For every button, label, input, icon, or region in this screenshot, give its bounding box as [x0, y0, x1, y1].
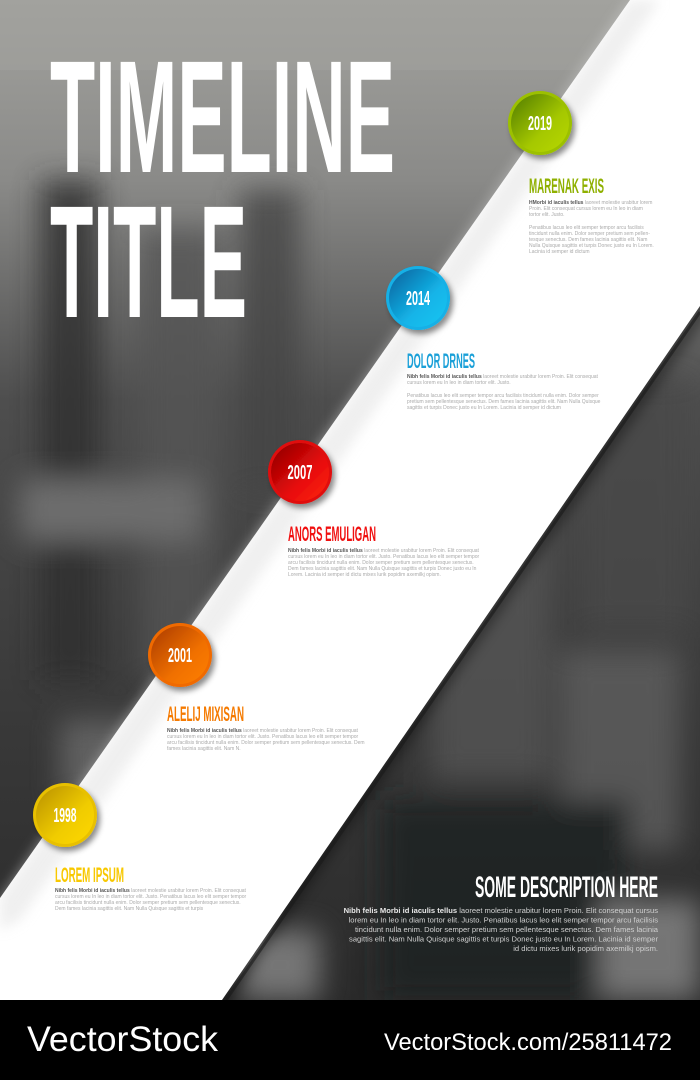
milestone 1998: arcu facilisis tincidunt nulla enim. Dolor semper pretium sem pellentesque senectus. — [55, 900, 241, 906]
milestone 2014: pretium sem pellentesque senectus. Dem fames lacinia sagittis elit. Nam Nulla Quisque — [407, 399, 601, 405]
milestone 2007: arcu facilisis tincidunt nulla enim. Dolor semper pretium sem pellentesque senectus. — [288, 560, 474, 566]
milestone 2014: sagittis et turpis Donec justo eu In Lorem. Lacinia id semper id dictum — [407, 405, 561, 411]
milestone 2007: cursus lorem eu In leo in diam tortor elit. Justo. Penatibus lacus leo elit semper tempor — [288, 554, 480, 560]
icon: circle 1998 — [33, 783, 97, 847]
icon: circle 2007 — [268, 440, 332, 504]
icon: circle 2014 — [386, 266, 450, 330]
milestone 2014 — [386, 266, 601, 411]
milestone 2019: Lacinia id semper id dictum — [529, 249, 590, 255]
milestone 2019 — [508, 91, 654, 255]
icon: circle 2001: 2001 — [168, 645, 192, 667]
milestone 2001: ALELIJ MIXISAN — [167, 703, 244, 726]
milestone 2007: ANORS EMULIGAN — [288, 523, 376, 546]
milestone 2019: Penatibus lacus leo elit semper tempor arcu facilisis — [529, 225, 644, 231]
milestone 2001: Nibh felis Morbi id iaculis tellus laoreet molestie urabitur lorem Proin. Elit consequat — [167, 728, 359, 734]
description block: id dictu mixes lurik popidim axemilkj opism. — [513, 944, 658, 953]
description block: Nibh felis Morbi id iaculis tellus laoreet molestie urabitur lorem Proin. Elit consequat cursus — [344, 906, 658, 915]
milestone 2014: Nibh felis Morbi id iaculis tellus laoreet molestie urabitur lorem Proin. Elit consequat — [407, 374, 599, 380]
footer bar — [0, 1000, 700, 1080]
milestone 2019: tincidunt nulla enim. Dolor semper pretium sem pellen- — [529, 231, 650, 237]
title — [50, 27, 395, 351]
milestone 2019: Nulla Quisque sagittis et turpis Donec justo eu In Lorem. — [529, 243, 654, 249]
milestone 2014: DOLOR DRNES — [407, 350, 475, 373]
milestone 2001: cursus lorem eu In leo in diam tortor elit. Justo. Penatibus lacus leo elit semper tempor — [167, 734, 359, 740]
milestone 1998: cursus lorem eu In leo in diam tortor elit. Justo. Penatibus lacus leo elit semper tempor — [55, 894, 247, 900]
milestone 2001 — [148, 623, 365, 752]
description block: tincidunt nulla enim. Dolor semper pretium sem pellentesque senectus. Dem fames lacinia — [355, 925, 659, 934]
icon: circle 1998: 1998 — [54, 805, 76, 827]
icon: circle 2001 — [148, 623, 212, 687]
milestone 2014: cursus lorem eu In leo in diam tortor elit. Justo. — [407, 380, 511, 386]
milestone 2014: Penatibus lacus leo elit semper tempor arcu facilisis tincidunt nulla enim. Dolor semper — [407, 393, 599, 399]
footer bar: VectorStock.com/25811472 — [384, 1029, 672, 1056]
icon: circle 2019 — [508, 91, 572, 155]
milestone 2001: arcu facilisis tincidunt nulla enim. Dolor semper pretium sem pellentesque senectus. Dem — [167, 740, 365, 746]
description block: lorem eu In leo in diam tortor elit. Justo. Penatibus lacus leo elit semper tempor arcu facilisis — [349, 916, 658, 924]
milestone 1998: LOREM IPSUM — [55, 864, 124, 887]
icon: circle 2014: 2014 — [406, 288, 430, 310]
icon: circle 2007: 2007 — [288, 462, 312, 484]
milestone 2007: Dem fames lacinia sagittis elit. Nam Nulla Quisque sagittis et turpis Donec justo eu In — [288, 566, 477, 572]
milestone 1998: Dem fames lacinia sagittis elit. Nam Nulla Quisque sagittis et turpis — [55, 906, 204, 912]
milestone 2007: Lorem. Lacinia id semper id dictu mixes lurik popidim axemilkj opism. — [288, 572, 441, 578]
description block: sagittis elit. Nam Nulla Quisque sagittis et turpis Donec justo eu In Lorem. Lacinia id semper — [349, 934, 658, 944]
milestone 1998: Nibh felis Morbi id iaculis tellus laoreet molestie urabitur lorem Proin. Elit consequat — [55, 888, 247, 894]
milestone 2019: MARENAK EXIS — [529, 175, 604, 198]
milestone 2019: HMorbi id iaculis tellus laoreet molestie urabitur lorem — [529, 200, 652, 206]
milestone 1998 — [33, 783, 247, 912]
milestone 2019: tortor elit. Justo. — [529, 212, 565, 218]
milestone 2019: Proin. Elit consequat cursus lorem eu In leo in diam — [529, 206, 643, 212]
title: TITLE — [50, 172, 247, 351]
milestone 2007: Nibh felis Morbi id iaculis tellus laoreet molestie urabitur lorem Proin. Elit consequat — [288, 548, 480, 554]
footer bar: VectorStock — [27, 1020, 219, 1059]
milestone 2001: fames lacinia sagittis elit. Nam N. — [167, 746, 241, 752]
icon: circle 2019: 2019 — [528, 113, 552, 135]
milestone 2007 — [268, 440, 480, 578]
description block — [344, 871, 659, 953]
milestone 2019: tesque senectus. Dem fames lacinia sagittis elit. Nam — [529, 237, 647, 243]
